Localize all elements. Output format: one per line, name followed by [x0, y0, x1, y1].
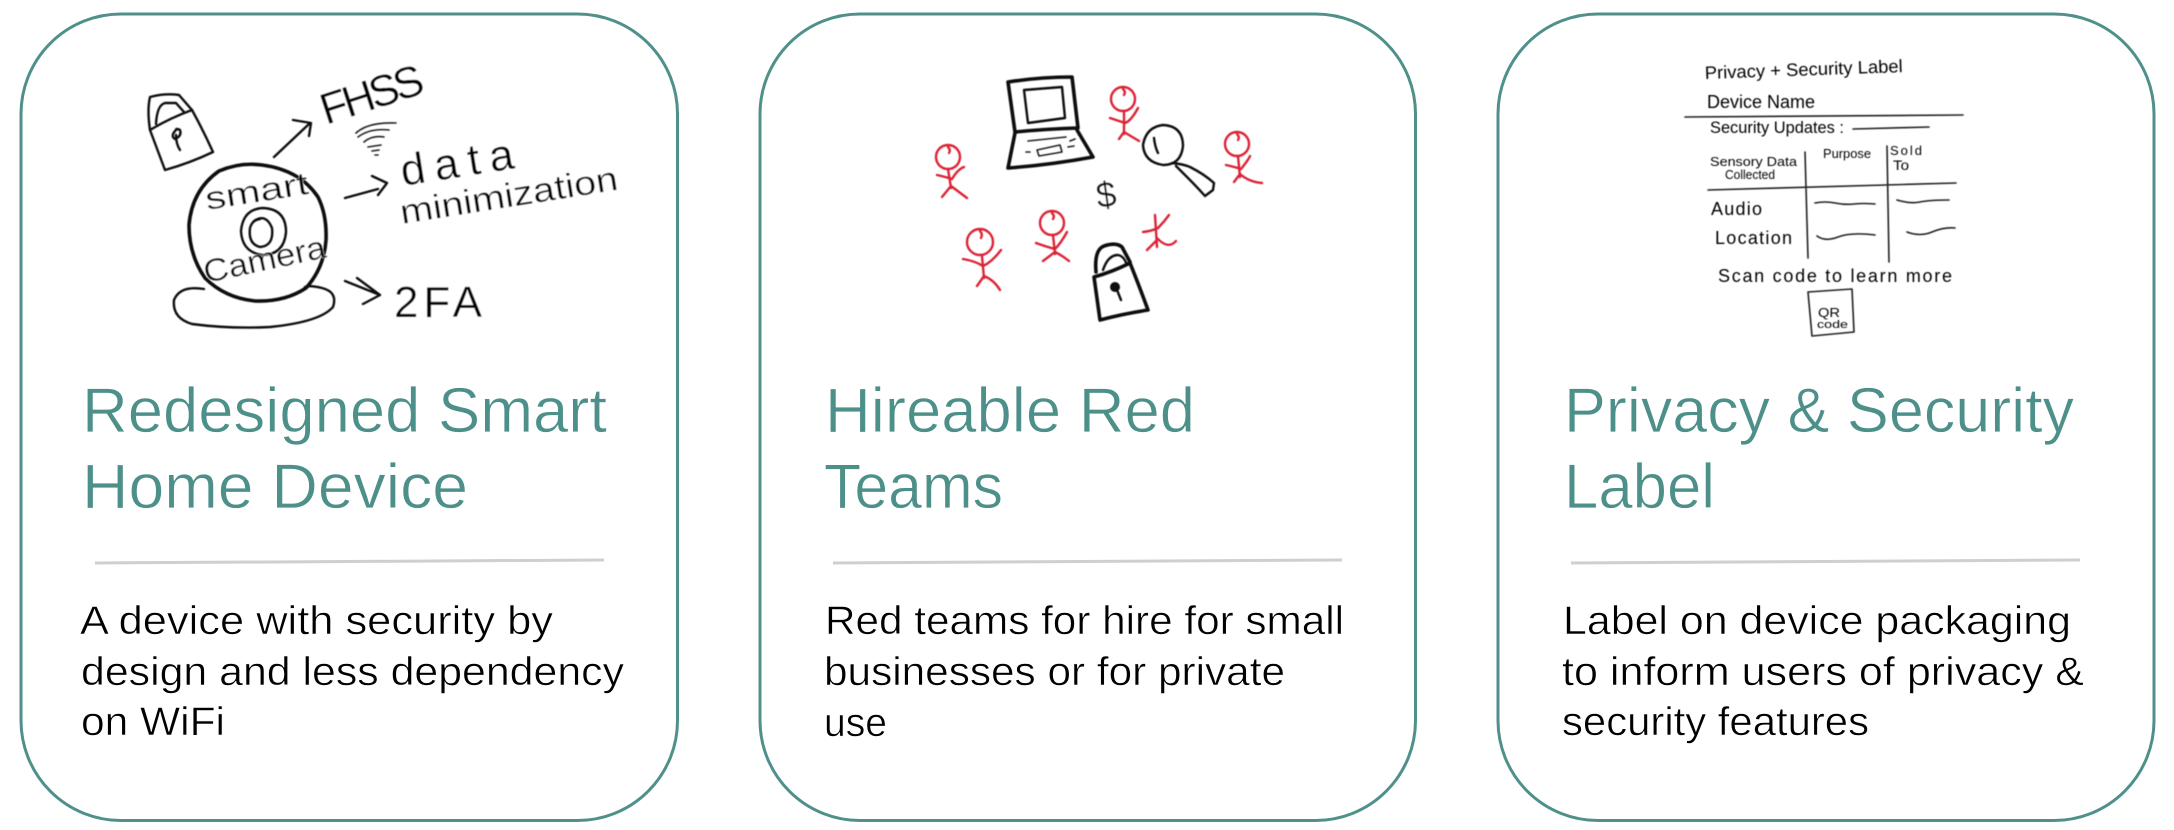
figure: red person near lock	[1143, 215, 1176, 250]
data table: Sold	[1890, 143, 1922, 158]
figure: red person right	[1225, 132, 1262, 183]
figure: red person lower centre	[1036, 211, 1069, 261]
data table: Location	[1715, 228, 1792, 248]
sketch: privacy and security label	[1685, 56, 1963, 336]
panel: redesigned smart home device	[21, 14, 678, 820]
panel: hireable red teams	[760, 14, 1416, 820]
card outline	[21, 14, 678, 820]
heading: Teams	[824, 452, 1003, 522]
data table: To	[1893, 157, 1909, 173]
description: businesses or for private	[824, 650, 1285, 694]
description: design and less dependency	[81, 650, 624, 694]
arrow to FHSS	[274, 120, 311, 157]
data table	[1708, 143, 1956, 262]
card outline	[760, 14, 1416, 820]
heading: Redesigned Smart	[82, 376, 607, 446]
camera label: Camera: Camera	[200, 229, 329, 290]
card outline	[1498, 14, 2154, 820]
arrow to 2FA	[345, 278, 380, 304]
icon: padlock	[148, 94, 213, 170]
camera label: smart: smart	[202, 165, 311, 217]
panel: privacy and security label	[1498, 14, 2154, 820]
figure: red person lower left	[963, 229, 1001, 290]
sketch: smart camera with security features	[148, 55, 621, 328]
description: Red teams for hire for small	[825, 599, 1344, 643]
description: to inform users of privacy &	[1562, 650, 2084, 694]
data table: Sensory Data	[1710, 154, 1798, 169]
description: security features	[1562, 700, 1869, 744]
sketch label: FHSS: FHSS	[314, 55, 430, 135]
icon: laptop	[1008, 77, 1093, 168]
icon: magnifying glass	[1143, 125, 1214, 196]
figure: red person top	[1110, 87, 1139, 141]
sketch label: minimization: minimization	[397, 160, 621, 232]
heading: Privacy & Security	[1564, 376, 2074, 446]
arrow to data minimization	[345, 176, 387, 198]
icon: camera base	[174, 286, 334, 328]
description: Label on device packaging	[1563, 599, 2071, 643]
security updates row: Security Updates :	[1710, 118, 1844, 137]
description: A device with security by	[80, 599, 553, 643]
icon: dollar sign: $	[1093, 173, 1119, 216]
sketch label: 2FA: 2FA	[394, 278, 483, 327]
icon: padlock	[1094, 244, 1148, 320]
icon: QR code box: QR	[1818, 305, 1840, 320]
icon: camera body	[189, 164, 326, 301]
label title: Privacy + Security Label	[1704, 56, 1903, 83]
icon: QR code box: code	[1817, 319, 1848, 331]
icon: wifi signal	[356, 123, 396, 155]
figure: red person left	[936, 145, 967, 198]
data table: Purpose	[1823, 146, 1871, 161]
heading: Home Device	[82, 452, 468, 522]
data table: Collected	[1725, 167, 1775, 182]
description: on WiFi	[81, 700, 225, 744]
scan code prompt: Scan code to learn more	[1718, 266, 1952, 286]
heading: Label	[1564, 452, 1715, 522]
description: use	[824, 701, 887, 745]
icon: QR code box	[1808, 289, 1854, 336]
heading: Hireable Red	[825, 376, 1195, 446]
data table: Audio	[1711, 199, 1762, 219]
sketch label: data: data	[397, 130, 518, 196]
sketch: red team people with laptop, magnifier, money and lock	[936, 77, 1262, 320]
device name: Device Name	[1707, 92, 1815, 112]
